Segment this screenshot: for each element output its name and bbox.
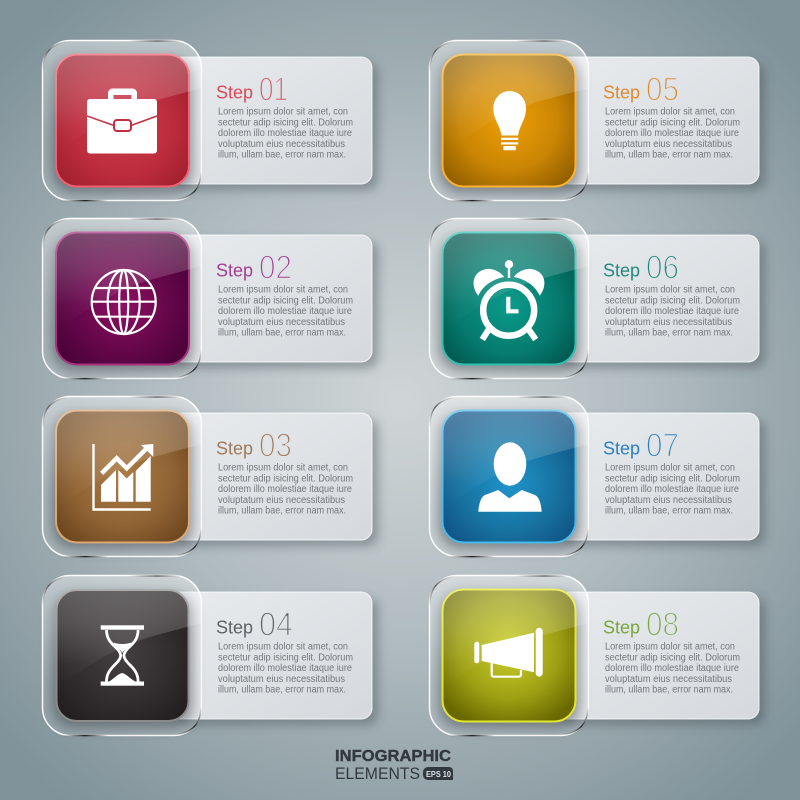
body text: illum, ullam bae, error nam max. [218,328,346,338]
heading: Step [603,438,640,458]
text panel [170,235,372,362]
body text: dolorem illo molestiae itaque iure [605,663,739,674]
tile shadow [439,56,580,193]
gloss highlight [42,40,198,128]
body text [605,285,740,338]
body text: illum, ullam bae, error nam max. [605,684,733,696]
body text: Lorem ipsum dolor sit amet, con [218,642,348,653]
heading: Step [216,260,253,280]
footer title: INFOGRAPHIC [335,748,451,765]
body text: Lorem ipsum dolor sit amet, con [218,463,348,474]
body text: Lorem ipsum dolor sit amet, con [218,107,348,118]
heading [603,427,679,464]
heading: Step [216,618,253,638]
colour tile [56,410,189,542]
colour tile [56,232,189,364]
body text: voluptatum eius necessitatibus [605,139,732,150]
body text: sectetur adip isicing elit. Dolorum [218,473,353,484]
body text: dolorem illo molestiae itaque iure [218,306,352,317]
body text: voluptatum eius necessitatibus [605,674,732,685]
body text: illum, ullam bae, error nam max. [605,150,733,160]
body text: illum, ullam bae, error nam max. [605,506,733,516]
body text: sectetur adip isicing elit. Dolorum [605,473,740,484]
text panel [557,413,759,540]
body text [218,107,353,160]
body text: Lorem ipsum dolor sit amet, con [605,463,735,474]
icon: hourglass [101,625,144,686]
heading [603,71,679,108]
text panel [557,57,759,184]
body text [218,463,353,516]
colour tile [442,410,576,542]
heading [603,606,679,643]
icon: alarm clock [474,260,544,340]
step 2 card [42,218,372,379]
tile shadow [52,591,193,728]
body text: sectetur adip isicing elit. Dolorum [218,117,353,128]
heading [216,427,292,464]
step 5 card [429,40,759,201]
glass frame [42,576,202,736]
body text: Lorem ipsum dolor sit amet, con [605,642,735,653]
gloss highlight [42,218,198,310]
body text [605,107,740,160]
step 7 card [429,396,759,557]
badge: EPS 10: EPS 10 [426,770,451,779]
gloss highlight [430,218,586,310]
gloss highlight [42,575,198,664]
body text: illum, ullam bae, error nam max. [218,150,346,160]
heading: 05 [646,71,679,108]
heading: Step [216,438,253,458]
body text: dolorem illo molestiae itaque iure [218,663,352,674]
body text: dolorem illo molestiae itaque iure [218,484,352,495]
body text: sectetur adip isicing elit. Dolorum [605,295,740,306]
text panel [557,235,759,362]
glass frame [42,40,202,201]
body text [605,463,740,516]
body text: illum, ullam bae, error nam max. [218,506,346,516]
heading [603,249,679,286]
tile shadow [52,56,193,193]
colour tile [56,54,189,186]
glass frame [430,40,588,201]
icon: person [478,442,542,512]
tile shadow [52,234,193,371]
glass frame [430,576,588,736]
heading: Step [603,618,640,638]
body text [218,285,353,338]
icon: growth chart [92,444,153,511]
body text: dolorem illo molestiae itaque iure [218,128,352,139]
heading [216,249,292,286]
body text: Lorem ipsum dolor sit amet, con [605,285,735,296]
heading: Step [603,82,640,102]
heading: 02 [259,249,292,286]
body text: illum, ullam bae, error nam max. [218,684,346,696]
text panel [557,592,759,719]
heading: 08 [646,606,679,643]
body text: sectetur adip isicing elit. Dolorum [605,117,740,128]
gloss highlight [430,40,586,132]
heading [216,71,288,108]
body text: sectetur adip isicing elit. Dolorum [218,652,353,663]
heading: 04 [259,606,293,643]
text panel [170,413,372,540]
icon: megaphone [474,628,543,677]
tile shadow [439,234,580,371]
heading: 07 [646,427,679,464]
body text [605,642,740,696]
colour tile [442,54,576,186]
glass frame [42,218,202,379]
step 1 card [42,40,372,201]
body text: voluptatum eius necessitatibus [218,139,345,150]
glass frame [42,396,202,557]
heading: Step [216,82,253,102]
step 4 card [42,575,372,736]
body text: voluptatum eius necessitatibus [218,317,345,328]
body text: voluptatum eius necessitatibus [605,495,732,506]
tile shadow [439,412,580,549]
gloss highlight [42,396,198,484]
heading: 01 [259,71,288,108]
footer logo [335,748,453,783]
colour tile [442,232,576,364]
tile shadow [439,591,580,728]
tile shadow [52,412,193,549]
gloss highlight [430,396,586,486]
body text: sectetur adip isicing elit. Dolorum [218,295,353,306]
body text: dolorem illo molestiae itaque iure [605,484,739,495]
body text: dolorem illo molestiae itaque iure [605,128,739,139]
icon: briefcase [87,88,157,154]
step 3 card [42,396,372,557]
icon: light bulb [493,91,526,150]
colour tile [56,590,188,721]
glass frame [430,396,588,557]
body text: illum, ullam bae, error nam max. [605,328,733,338]
body text: dolorem illo molestiae itaque iure [605,306,739,317]
colour tile [442,590,576,722]
heading: 03 [259,427,292,464]
step 6 card [429,218,759,379]
text panel [170,592,372,719]
heading: Step [603,260,640,280]
heading [216,606,293,643]
body text: voluptatum eius necessitatibus [218,495,345,506]
icon: globe [92,270,156,334]
glass frame [430,218,588,379]
gloss highlight [430,575,586,666]
body text [218,642,353,696]
body text: Lorem ipsum dolor sit amet, con [605,107,735,118]
footer subtitle: ELEMENTS [335,765,420,783]
heading: 06 [646,249,679,286]
body text: sectetur adip isicing elit. Dolorum [605,652,740,663]
step 8 card [429,575,759,736]
body text: Lorem ipsum dolor sit amet, con [218,285,348,296]
body text: voluptatum eius necessitatibus [605,317,732,328]
text panel [170,57,372,184]
body text: voluptatum eius necessitatibus [218,674,345,685]
